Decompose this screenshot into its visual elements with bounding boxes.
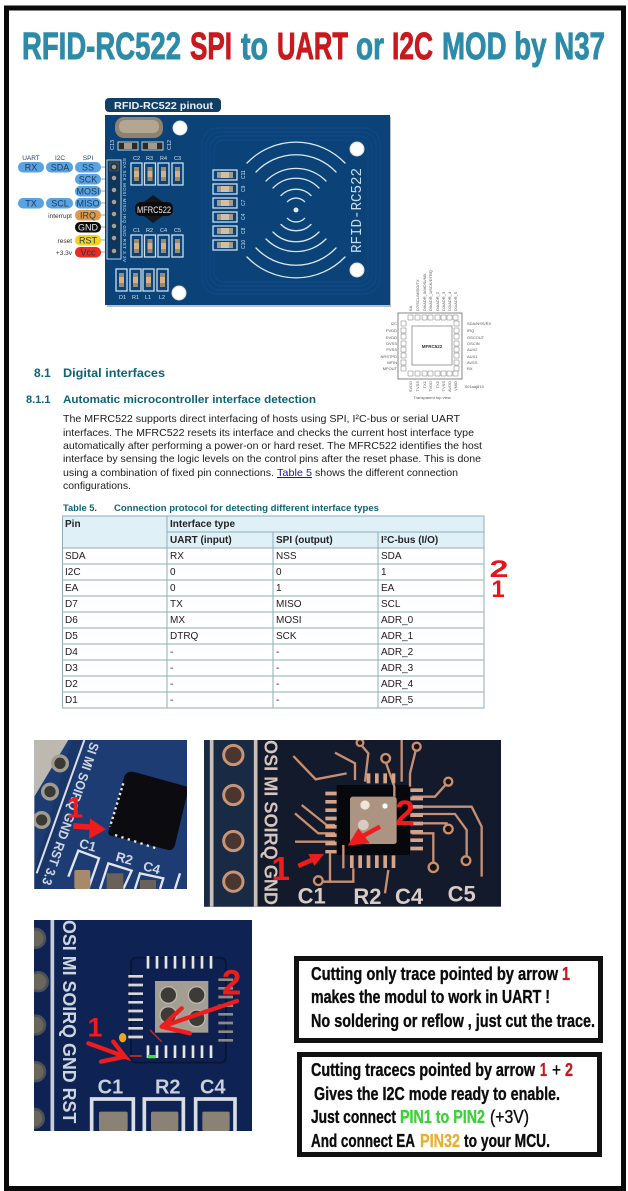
body paragraph: using a combination of fixed pin connections. [63, 467, 274, 479]
lower components: R2 [146, 228, 153, 234]
IC pin diagram: EA [408, 305, 413, 311]
pin labels: RST [79, 236, 98, 246]
section heading 8.1: 8.1 [34, 366, 51, 380]
callout: I2C instructions: And connect EA [311, 1131, 415, 1151]
crystal caps C13 C12: C13 [110, 140, 116, 150]
photo 3: cut trace locations: OSI MI SOIRQ GND RST [59, 920, 80, 1124]
pin labels: UART [22, 155, 40, 162]
pin labels: SCL [51, 198, 69, 208]
upper components: R3 [146, 156, 153, 162]
upper components: C2 [133, 156, 140, 162]
photo 2: exposed copper traces: C5 [448, 882, 476, 907]
table: connection protocol: Pin [65, 519, 81, 530]
handwritten numbers beside table: 1 [491, 576, 505, 603]
IC pin diagram [381, 270, 492, 400]
table: connection protocol: ADR_2 [381, 647, 414, 658]
title: UART [277, 26, 348, 68]
bottom components [116, 269, 168, 301]
photo 3: cut trace locations: 2 [222, 963, 241, 1002]
IC pin diagram: AVDD [447, 381, 452, 392]
callout: I2C instructions [300, 1054, 600, 1154]
callout: I2C instructions: 2 [565, 1060, 573, 1080]
lower components: C5 [174, 228, 181, 234]
bottom components: R1 [132, 295, 139, 301]
lower components [131, 228, 183, 257]
photo 2: exposed copper traces: C4 [395, 884, 424, 909]
pin labels: MOSI [76, 186, 100, 196]
IC pin diagram: RX [467, 366, 473, 371]
IC pin diagram: PVDD [386, 328, 397, 333]
IC pin diagram: D3/ADR_3 [441, 291, 446, 311]
crystal caps C13 C12: C12 [167, 140, 173, 150]
table: connection protocol: ADR_3 [381, 663, 414, 674]
table: connection protocol: SPI (output) [276, 535, 333, 546]
table: connection protocol: RX [170, 551, 184, 562]
table: connection protocol: D6 [65, 615, 78, 626]
pin labels: IRQ [80, 210, 96, 220]
body paragraph: interfaces. The MFRC522 resets its interface and checks the current host interface type [63, 427, 474, 439]
pin labels: reset [58, 238, 72, 245]
upper components: R4 [160, 156, 167, 162]
callout: UART instructions: makes the modul to work in UART ! [311, 987, 550, 1007]
IC pin diagram: SDA/NSS/RX [467, 321, 492, 326]
pinout heading pill: RFID-RC522 pinout [114, 101, 214, 112]
capacitor column: C7 [241, 199, 247, 206]
table: connection protocol: D4 [65, 647, 78, 658]
photo 2: exposed copper traces: C1 [298, 883, 326, 908]
crystal caps C13 C12 [110, 140, 173, 150]
table: connection protocol: - [276, 647, 279, 658]
IC pin diagram: OSCOUT [467, 335, 485, 340]
photo 1: chip close-up: 1 [67, 791, 83, 824]
lower components: C4 [160, 228, 167, 234]
section heading 8.1: Digital interfaces [63, 366, 165, 380]
photo 1: chip close-up: C4 [142, 858, 162, 877]
table caption: Connection protocol for detecting different interface types [114, 503, 379, 514]
handwritten numbers beside table [490, 556, 508, 603]
IC pin diagram: D5/ADR_1/SCK/DTRQ [428, 270, 433, 311]
callout: UART instructions: Cutting only trace pointed by arrow [311, 964, 559, 984]
table: connection protocol: D5 [65, 631, 78, 642]
IC pin diagram: TVSS [415, 381, 420, 391]
antenna arcs [247, 142, 345, 278]
body paragraph: The MFRC522 supports direct interfacing of hosts using SPI, I²C-bus or serial UART [63, 413, 461, 425]
photo 1: chip close-up: C1 [78, 836, 98, 855]
capacitor column: C4 [241, 213, 247, 220]
IC pin diagram: IRQ [467, 328, 474, 333]
callout: I2C instructions: to your MCU. [464, 1131, 550, 1151]
body paragraph: shows the different connection [315, 467, 458, 479]
photo 3: cut trace locations [25, 920, 252, 1131]
body paragraph: interface by sensing the logic levels on the control pins after the reset phase. This is done [63, 453, 481, 465]
pin labels: SPI [83, 155, 93, 162]
MFRC522 chip [135, 195, 173, 223]
IC pin diagram: PVSS [386, 347, 397, 352]
IC pin diagram: TVDD [428, 381, 433, 392]
pin labels: interrupt [48, 213, 72, 220]
IC pin diagram: NRSTPD [381, 354, 397, 359]
table: connection protocol: ADR_4 [381, 679, 414, 690]
table: connection protocol: 0 [170, 583, 176, 594]
body paragraph [63, 413, 482, 492]
IC pin diagram: OSCIN [467, 341, 480, 346]
IC pin diagram: D1/ADR_5 [453, 291, 458, 311]
table: connection protocol: - [276, 663, 279, 674]
table: connection protocol: D3 [65, 663, 78, 674]
callout: I2C instructions: Cutting tracecs pointed by arrow [311, 1060, 536, 1080]
table: connection protocol: EA [65, 583, 79, 594]
table: connection protocol: 0 [276, 567, 282, 578]
bottom components: L2 [159, 295, 165, 301]
callout: I2C instructions: Just connect [311, 1107, 396, 1127]
upper components: C3 [174, 156, 181, 162]
header silk labels: SDA SCK MOSI MISO IRQ GND RST 3.3V [122, 158, 127, 262]
IC pin diagram: D6/ADR_0/MOSI/MX [422, 273, 427, 311]
pin labels: MISO [76, 198, 100, 208]
crystal [115, 117, 163, 138]
IC pin diagram: AVSS [467, 360, 478, 365]
pin labels: GND [78, 222, 98, 232]
IC pin diagram: SVDD [408, 381, 413, 392]
table: connection protocol: - [276, 679, 279, 690]
table: connection protocol: MOSI [276, 615, 302, 626]
photo 2: exposed copper traces: OSI MI SOIRQ GND [260, 740, 281, 905]
title: I2C [392, 26, 433, 68]
pin labels: SDA [51, 162, 69, 172]
table: connection protocol: SDA [65, 551, 86, 562]
table: connection protocol: SCK [276, 631, 297, 642]
callout: I2C instructions: PIN1 to PIN2 [400, 1107, 485, 1127]
handwritten numbers beside table: 2 [490, 556, 508, 583]
bottom components: L1 [145, 295, 151, 301]
pin labels [18, 155, 112, 258]
capacitor column: C10 [241, 240, 247, 249]
pin labels: Vcc [80, 248, 96, 258]
title: to [241, 26, 268, 68]
callout: I2C instructions: Gives the I2C mode ready to enable. [314, 1084, 560, 1104]
table: connection protocol: DTRQ [170, 631, 199, 642]
table: connection protocol: EA [381, 583, 395, 594]
table: connection protocol [62, 516, 484, 708]
body paragraph: configurations. [63, 480, 131, 492]
IC pin diagram: MFRC522 [422, 344, 443, 349]
table: connection protocol: MISO [276, 599, 302, 610]
IC pin diagram: D7/SCL/MISO/TX [415, 279, 420, 311]
IC pin diagram: I2C [391, 321, 397, 326]
callout: I2C instructions: PIN32 [420, 1131, 460, 1151]
photo 2: exposed copper traces: 1 [271, 851, 290, 888]
table: connection protocol: I2C [65, 567, 81, 578]
IC pin diagram: Transparent top view [413, 395, 451, 400]
IC pin diagram: MFOUT [383, 366, 398, 371]
table: connection protocol: - [170, 679, 173, 690]
section heading 8.1.1: 8.1.1 [26, 394, 50, 406]
table: connection protocol: NSS [276, 551, 297, 562]
table: connection protocol: 1 [381, 567, 387, 578]
IC pin diagram: VMID [453, 381, 458, 391]
capacitor column: C9 [241, 185, 247, 192]
table: connection protocol: D7 [65, 599, 78, 610]
capacitor column [213, 170, 247, 250]
photo 3: cut trace locations: C1 [98, 1076, 123, 1098]
pin labels: TX [25, 198, 37, 208]
board name: RFID-RC522 [349, 168, 366, 253]
photo 1: chip close-up [34, 740, 188, 890]
bottom components: D1 [119, 295, 126, 301]
table: connection protocol: MX [170, 615, 185, 626]
title: SPI [190, 26, 232, 68]
table: connection protocol: SCL [381, 599, 401, 610]
body paragraph: Table 5 [277, 467, 312, 479]
table: connection protocol: ADR_1 [381, 631, 414, 642]
table: connection protocol: - [276, 695, 279, 706]
body paragraph: automatically after performing a power-on or hard reset. The MFRC522 identifies the host [63, 440, 482, 452]
callout: I2C instructions: + [552, 1060, 561, 1080]
IC pin diagram: TX1 [422, 380, 427, 388]
IC pin diagram: TVSS [441, 381, 446, 391]
capacitor column: C8 [241, 227, 247, 234]
table: connection protocol: I²C-bus (I/O) [381, 535, 438, 546]
table: connection protocol: 0 [170, 567, 176, 578]
RFID-RC522 board [105, 115, 391, 307]
pinout heading pill [105, 98, 221, 112]
capacitor column: C11 [241, 170, 247, 179]
table: connection protocol: - [170, 647, 173, 658]
photo 1: chip close-up: SI MI SOIRQ GND RST 3.3 [39, 740, 102, 887]
callout: UART instructions [296, 958, 600, 1040]
pin labels: SS [82, 162, 94, 172]
photo 2: exposed copper traces [204, 739, 501, 909]
photo 2: exposed copper traces: R2 [353, 884, 381, 909]
table: connection protocol: TX [170, 599, 183, 610]
IC pin diagram: DVDD [386, 335, 397, 340]
IC pin diagram: AUX2 [467, 347, 478, 352]
photo 3: cut trace locations: C4 [200, 1076, 226, 1098]
table: connection protocol: ADR_5 [381, 695, 414, 706]
table: connection protocol: 1 [276, 583, 282, 594]
table caption: Table 5. [63, 503, 97, 514]
callout: I2C instructions: (+3V) [490, 1107, 529, 1127]
title [22, 26, 605, 68]
pin labels: SCK [79, 174, 97, 184]
callout: UART instructions: 1 [562, 964, 570, 984]
callout: I2C instructions: 1 [540, 1060, 547, 1080]
IC pin diagram: D4/ADR_2 [435, 291, 440, 311]
table: connection protocol: D1 [65, 695, 78, 706]
IC pin diagram: DVSS [386, 341, 397, 346]
pin labels: I2C [55, 155, 65, 162]
photo 3: cut trace locations: R2 [155, 1076, 181, 1098]
pin labels: RX [25, 162, 37, 172]
pin header [107, 160, 121, 259]
MFRC522 chip: MFRC522 [137, 205, 171, 216]
title: RFID-RC522 [22, 26, 181, 68]
IC pin diagram: MFIN [387, 360, 397, 365]
photo 3: cut trace locations: 1 [88, 1013, 103, 1043]
mounting holes [172, 121, 364, 300]
table: connection protocol: D2 [65, 679, 78, 690]
table: connection protocol: UART (input) [170, 535, 232, 546]
IC pin diagram: AUX1 [467, 354, 478, 359]
IC pin diagram: 001aaj819 [465, 384, 484, 389]
photo 2: exposed copper traces: 2 [395, 794, 415, 833]
IC pin diagram: TX2 [435, 380, 440, 388]
table: connection protocol: ADR_0 [381, 615, 414, 626]
antenna coil traces [202, 128, 380, 294]
table: connection protocol: Interface type [170, 519, 235, 530]
IC pin diagram: D2/ADR_4 [447, 291, 452, 311]
section heading 8.1.1: Automatic microcontroller interface detection [63, 394, 316, 406]
photo 1: chip close-up: R2 [114, 849, 135, 868]
pin labels: +3.3v [56, 250, 73, 257]
lower components: C1 [133, 228, 140, 234]
table: connection protocol: - [170, 663, 173, 674]
table: connection protocol: SDA [381, 551, 402, 562]
upper components [131, 156, 183, 185]
title: or [356, 26, 384, 68]
table: connection protocol: - [170, 695, 173, 706]
